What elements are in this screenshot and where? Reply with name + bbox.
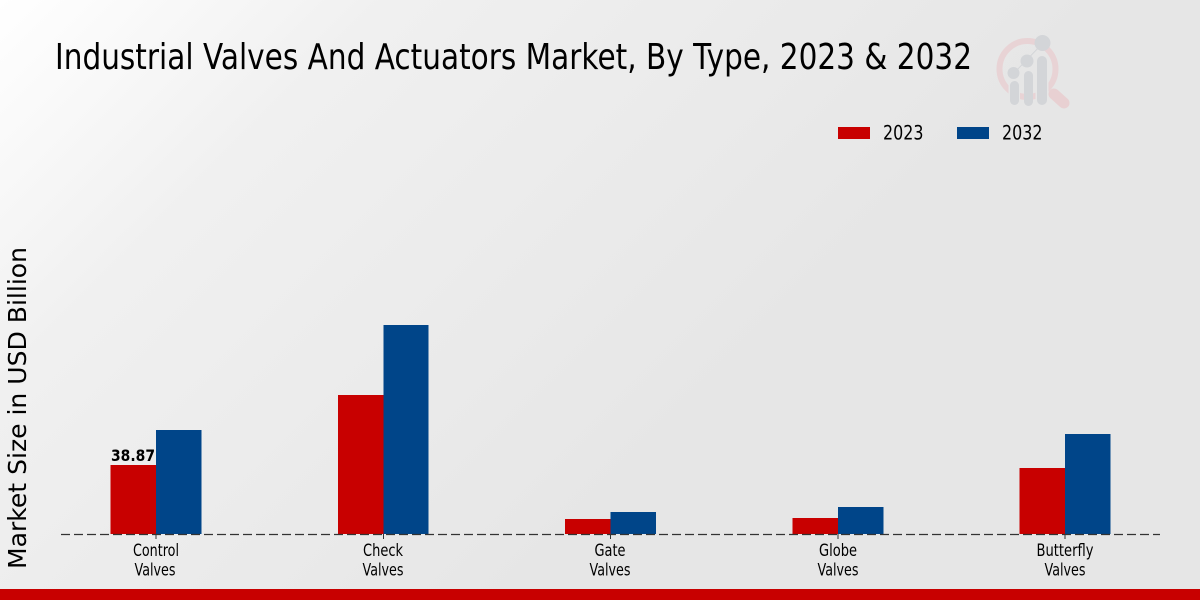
- category label: globe valves: Globe: [819, 541, 857, 560]
- legend item: 2032: 2032: [1002, 122, 1042, 144]
- footer bar: [0, 589, 1200, 600]
- icon: magnifier logo watermark: [994, 35, 1064, 107]
- bar chart: [61, 325, 1160, 580]
- legend item: 2032: [957, 122, 1042, 144]
- category label: control valves: Valves: [134, 560, 176, 580]
- y-axis label: Market Size in USD Billion: [3, 247, 32, 569]
- category label: gate valves: Gate: [594, 541, 626, 560]
- bars: globe valves: [792, 507, 884, 534]
- category label: control valves: Control: [133, 541, 179, 560]
- bars: butterfly valves: [1020, 434, 1110, 534]
- legend item: 2023: 2023: [883, 122, 924, 144]
- legend: [838, 122, 1042, 144]
- category label: butterfly valves: Butterfly: [1036, 541, 1094, 560]
- category label: check valves: Check: [363, 541, 403, 560]
- legend item: 2023: [838, 122, 924, 144]
- category label: gate valves: Valves: [590, 560, 630, 580]
- category label: globe valves: Valves: [818, 560, 858, 580]
- bars: check valves: [338, 325, 428, 534]
- title: Industrial Valves And Actuators Market, By Type, 2023 & 2032: [55, 37, 972, 78]
- data label: 38.87: 38.87: [111, 446, 155, 465]
- bars: control valves: [110, 430, 202, 534]
- category label: butterfly valves: Valves: [1044, 560, 1086, 580]
- category label: check valves: Valves: [362, 560, 404, 580]
- bars: gate valves: [565, 512, 656, 534]
